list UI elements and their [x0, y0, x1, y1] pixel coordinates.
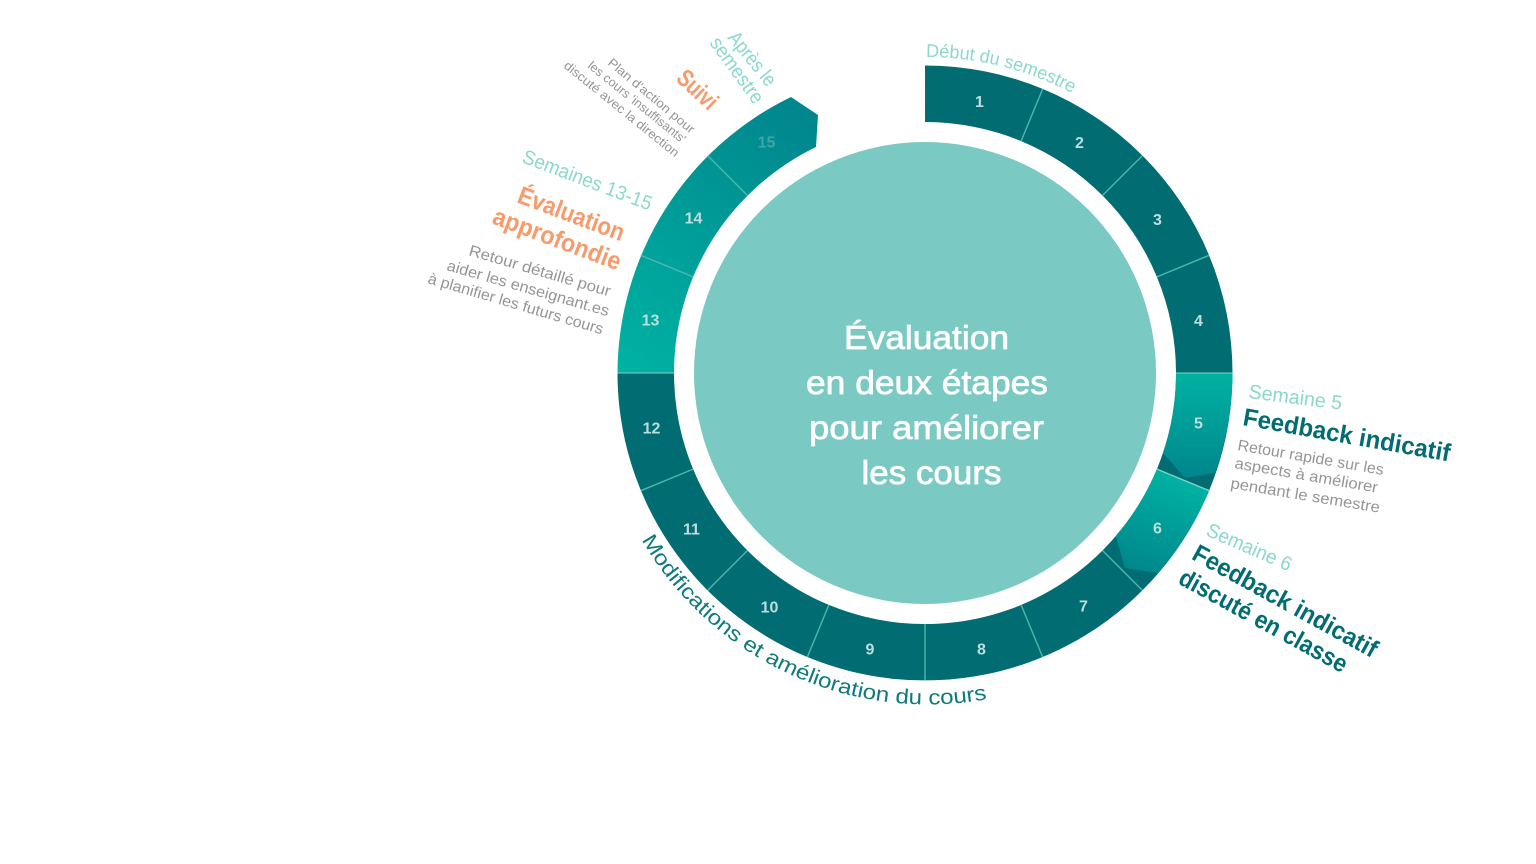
callout: after the semester: les cours 'insuffisants'	[585, 58, 689, 146]
week numbers: 3	[1153, 212, 1162, 229]
callout: after the semester: Suivi	[671, 64, 724, 116]
week numbers: 7	[1079, 598, 1088, 616]
week numbers: 11	[683, 522, 700, 538]
callout: after the semester: Après le	[723, 27, 780, 91]
week numbers: 8	[977, 642, 986, 658]
callout: week 5: Retour rapide sur les	[1236, 437, 1385, 479]
title	[806, 319, 1048, 491]
callout: after the semester: Plan d'action pour	[605, 56, 698, 136]
callout: weeks 13 to 15: Évaluation	[514, 180, 629, 247]
ring: weeks 13 to 15	[618, 97, 818, 373]
ring: week 6 highlight	[1116, 469, 1209, 573]
callout: week 5	[1229, 381, 1453, 517]
callout: week 5: aspects à améliorer	[1233, 455, 1379, 497]
callout: after the semester: discuté avec la direction	[561, 58, 682, 160]
callout: after the semester: semestre	[705, 33, 768, 108]
ring: week 6 base	[1102, 469, 1209, 590]
week numbers: 1	[975, 94, 984, 111]
week numbers	[642, 94, 1203, 658]
callout: week 6: Semaine 6	[1203, 519, 1295, 576]
ring: weeks 7 to 12	[618, 373, 1142, 680]
week numbers: 12	[643, 420, 660, 438]
week numbers: 10	[761, 600, 778, 616]
callout: weeks 13 to 15: Retour détaillé pour	[467, 243, 613, 300]
title: en deux étapes	[806, 364, 1048, 401]
callout: weeks 13 to 15: aider les enseignant.es	[445, 258, 611, 320]
callout: week 5: Feedback indicatif	[1241, 403, 1453, 467]
label: course changes: Modifications et amélioration du cours	[642, 534, 986, 705]
title: pour améliorer	[809, 409, 1044, 446]
callout: weeks 13 to 15: approfondie	[489, 202, 625, 276]
center circle with title	[694, 142, 1156, 604]
callout: week 6: Feedback indicatif	[1188, 539, 1383, 664]
title: les cours	[862, 454, 1002, 491]
ring: week 5 base	[1157, 373, 1232, 491]
callout: after the semester	[561, 27, 780, 160]
callout: week 5: pendant le semestre	[1229, 475, 1381, 517]
week numbers: 2	[1075, 135, 1084, 152]
week numbers: 14	[685, 210, 702, 228]
callout: week 6: discuté en classe	[1174, 564, 1353, 679]
callout: weeks 13 to 15	[426, 146, 655, 338]
week numbers: 4	[1194, 313, 1203, 330]
week numbers: 5	[1194, 416, 1203, 432]
ring: weeks 1 to 4	[925, 66, 1232, 373]
week numbers: 9	[866, 642, 875, 658]
callout: week 5: Semaine 5	[1247, 381, 1343, 415]
ring: week 5 highlight	[1163, 373, 1232, 478]
label: start of semester: Début du semestre	[928, 44, 1074, 92]
title: Évaluation	[844, 319, 1009, 356]
week numbers: 6	[1153, 520, 1162, 538]
callout: weeks 13 to 15: Semaines 13-15	[519, 146, 655, 215]
week numbers: 15	[758, 134, 776, 152]
callout: weeks 13 to 15: à planifier les futurs cours	[426, 271, 606, 338]
week numbers: 13	[642, 312, 660, 330]
